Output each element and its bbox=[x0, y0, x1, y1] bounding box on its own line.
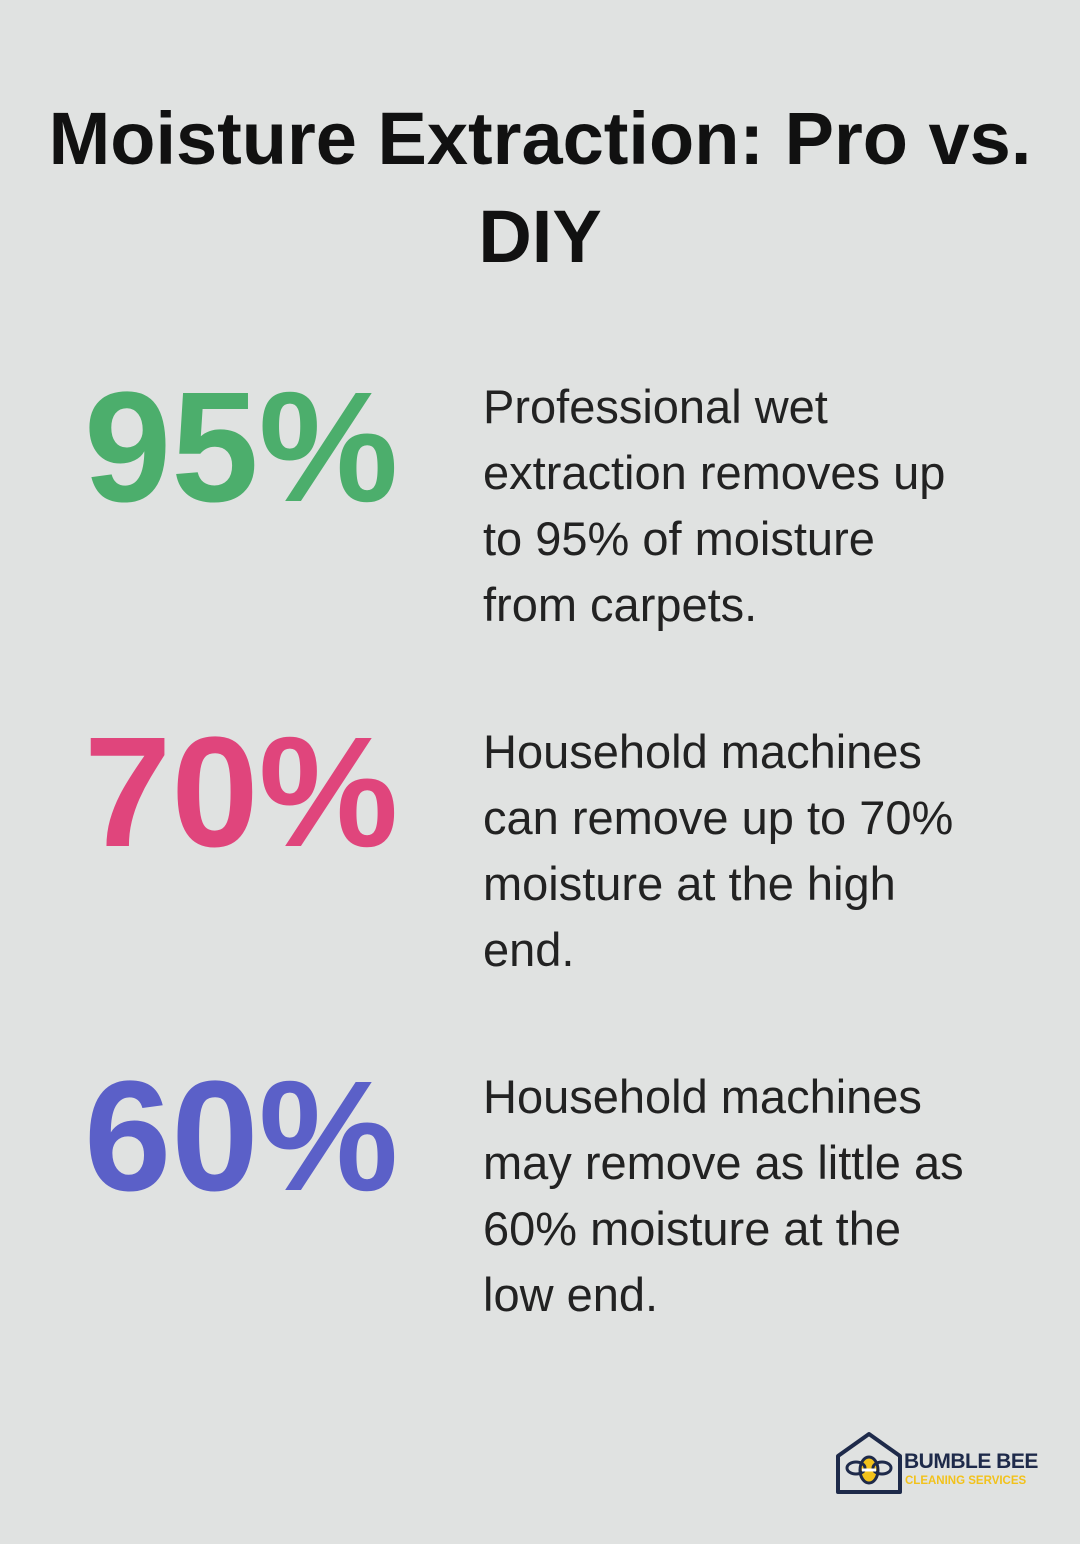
title bbox=[49, 97, 1031, 278]
text: 60% description: may remove as little as bbox=[483, 1136, 964, 1189]
text: 70% description: can remove up to 70% bbox=[483, 791, 953, 844]
text: 95% description: Professional wet bbox=[483, 380, 828, 433]
title: Moisture Extraction: Pro vs. bbox=[49, 97, 1031, 180]
text: 60% description: Household machines bbox=[483, 1070, 922, 1123]
logo text: BUMBLE BEE bbox=[904, 1450, 1038, 1473]
stat: 70%: 70% bbox=[84, 705, 398, 880]
text: 70% description: moisture at the high bbox=[483, 857, 896, 910]
text: 70% description: end. bbox=[483, 923, 574, 976]
text: 95% description: from carpets. bbox=[483, 578, 757, 631]
icon: bee house bbox=[836, 1432, 902, 1494]
text: 70% description bbox=[483, 725, 953, 976]
title: DIY bbox=[478, 195, 602, 278]
text: 95% description: to 95% of moisture bbox=[483, 512, 875, 565]
text: 60% description: low end. bbox=[483, 1268, 658, 1321]
logo: CLEANING SERVICES bbox=[905, 1475, 1026, 1487]
text: 60% description: 60% moisture at the bbox=[483, 1202, 901, 1255]
text: 60% description bbox=[483, 1070, 964, 1321]
logo bbox=[836, 1432, 1038, 1494]
stat: 95%: 95% bbox=[84, 360, 398, 535]
text: 95% description bbox=[483, 380, 945, 631]
text: 95% description: extraction removes up bbox=[483, 446, 945, 499]
stat: 60%: 60% bbox=[84, 1049, 398, 1224]
text: 70% description: Household machines bbox=[483, 725, 922, 778]
